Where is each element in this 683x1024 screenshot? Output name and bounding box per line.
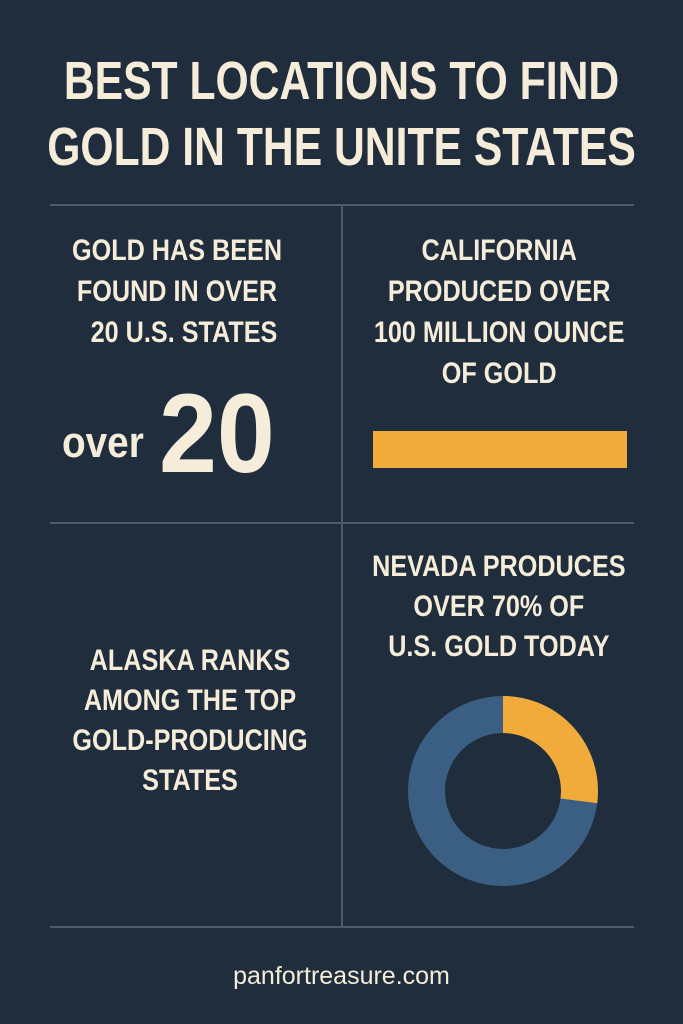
- title: BEST LOCATIONS TO FIND: [64, 51, 619, 111]
- text: Alaska: ALASKA RANKS: [90, 644, 290, 677]
- text: California: [374, 234, 624, 390]
- text: gold found: 20 U.S. STATES: [91, 316, 277, 349]
- text: Alaska: AMONG THE TOP: [84, 684, 296, 717]
- title: GOLD IN THE UNITE STATES: [47, 117, 636, 177]
- stat: over 20: 20: [159, 371, 275, 496]
- footer: panfortreasure.com: [233, 962, 450, 990]
- text: California: CALIFORNIA: [421, 234, 577, 267]
- panel: Alaska: [72, 644, 308, 797]
- bar: [373, 431, 627, 468]
- text: Alaska: GOLD-PRODUCING: [72, 724, 308, 757]
- text: Nevada: OVER 70% OF: [414, 590, 584, 623]
- donut chart: [408, 696, 598, 886]
- text: Nevada: NEVADA PRODUCES: [372, 550, 626, 583]
- panel: Nevada: [372, 550, 626, 886]
- text: gold found: [72, 234, 282, 349]
- panel: California: [373, 234, 627, 468]
- text: Nevada: U.S. GOLD TODAY: [388, 630, 610, 663]
- text: Nevada: [372, 550, 626, 663]
- panel: gold found in over 20 states: [62, 234, 282, 496]
- text: California: 100 MILLION OUNCE: [374, 316, 624, 349]
- title: [47, 51, 636, 177]
- text: Alaska: STATES: [142, 764, 238, 797]
- text: California: OF GOLD: [442, 357, 556, 390]
- text: gold found: GOLD HAS BEEN: [72, 234, 282, 267]
- stat: over 20: [62, 371, 275, 496]
- stat: over 20: over: [62, 418, 144, 467]
- text: Alaska: [72, 644, 308, 797]
- text: gold found: FOUND IN OVER: [77, 275, 277, 308]
- text: California: PRODUCED OVER: [388, 275, 610, 308]
